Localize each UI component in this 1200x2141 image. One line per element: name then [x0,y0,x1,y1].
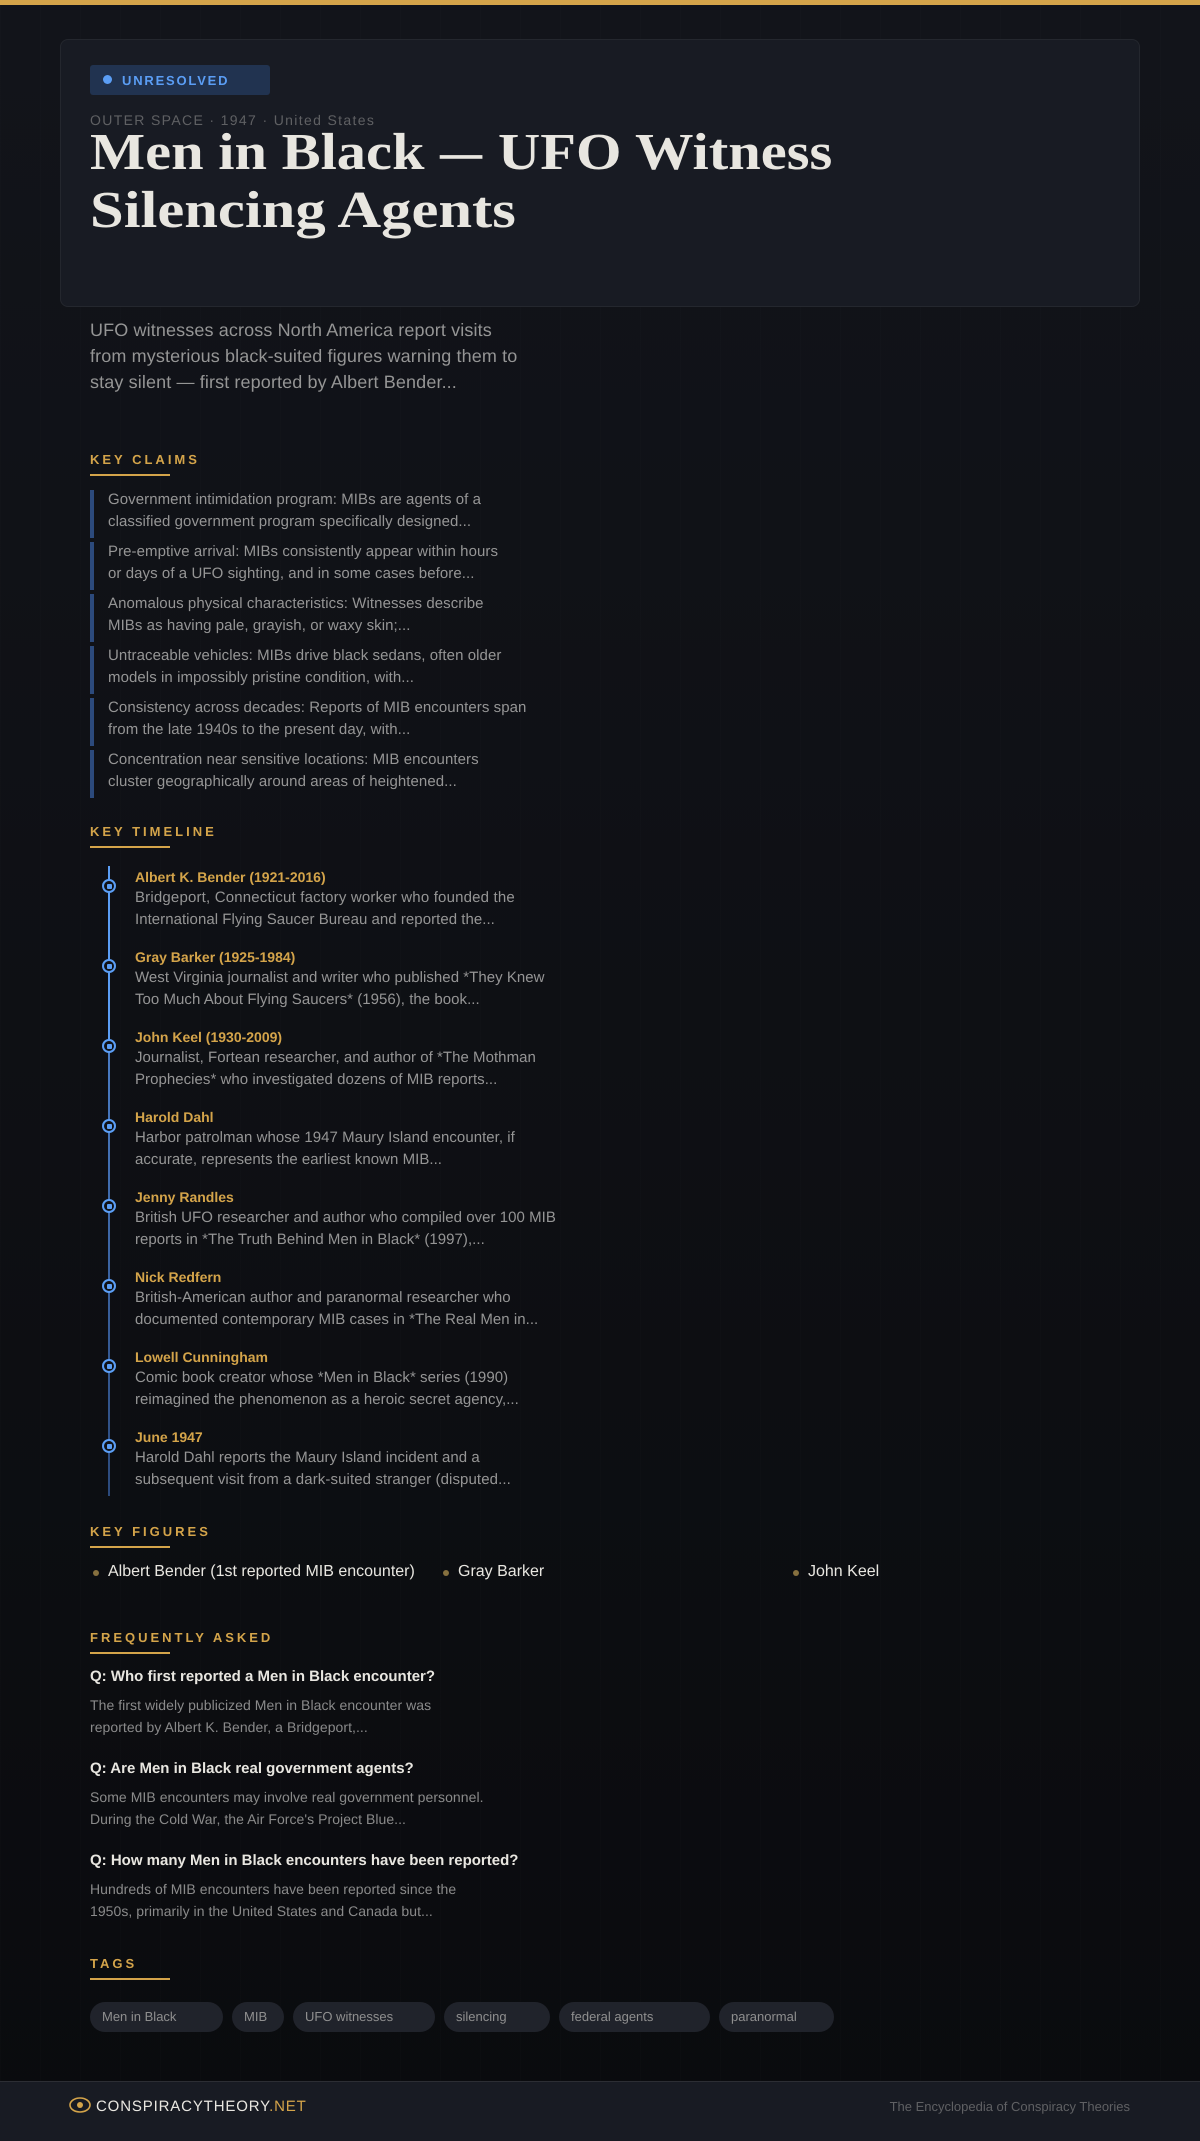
event: John Keel: Journalist, Fortean researcher, and author of *The Mothman [135,1049,536,1066]
heading: key claims: KEY CLAIMS [90,452,200,467]
event: June 1947: Harold Dahl reports the Maury Island incident and a [135,1449,480,1466]
event: Lowell Cunningham: reimagined the phenomenon as a heroic secret agency,... [135,1391,519,1408]
faq 2 [90,1760,484,1827]
tag: MIB: MIB [244,2009,267,2024]
title: Silencing Agents [90,182,516,239]
badge label: UNRESOLVED [122,73,229,88]
claim 5: Consistency across decades: Reports of MIB encounters span [108,699,526,716]
event: Gray Barker: Gray Barker (1925-1984) [135,949,295,965]
faq 1: reported by Albert K. Bender, a Bridgeport,... [90,1719,368,1735]
tag: paranormal: paranormal [731,2009,797,2024]
node 4 [102,1119,116,1133]
tag: MIB [232,2002,284,2032]
title: — [440,124,482,181]
figure: Gray Barker: Gray Barker [458,1563,544,1580]
event: Lowell Cunningham: Comic book creator whose *Men in Black* series (1990) [135,1369,508,1386]
faq 2: During the Cold War, the Air Force's Project Blue... [90,1811,406,1827]
faq 1: Q: Who first reported a Men in Black encounter? [90,1668,435,1685]
event: Harold Dahl: accurate, represents the earliest known MIB... [135,1151,442,1168]
claim 5: from the late 1940s to the present day, with... [108,721,410,738]
event: John Keel [135,1029,536,1088]
node 1 [102,879,116,893]
icon: status dot [103,75,112,84]
faq 3 [90,1852,518,1919]
claim 5 [90,698,550,746]
node 5 [102,1199,116,1213]
faq 1 [90,1668,435,1735]
meta line: OUTER SPACE · 1947 · United States [90,112,375,128]
event: Jenny Randles: British UFO researcher and author who compiled over 100 MIB [135,1209,556,1226]
timeline line [108,866,110,1496]
claim 2: or days of a UFO sighting, and in some cases before... [108,565,474,582]
tag: UFO witnesses: UFO witnesses [305,2009,393,2024]
logo wordmark: CONSPIRACYTHEORY.NET [96,2098,307,2115]
claim 3 [90,594,550,642]
footer [0,2081,1200,2141]
event: Harold Dahl [135,1109,515,1168]
faq 3: Q: How many Men in Black encounters have been reported? [90,1852,518,1869]
event: Harold Dahl: Harbor patrolman whose 1947 Maury Island encounter, if [135,1129,515,1146]
tag: federal agents [559,2002,710,2032]
claim 4: Untraceable vehicles: MIBs drive black sedans, often older [108,647,501,664]
event: Lowell Cunningham [135,1349,519,1408]
event: Albert K. Bender: Albert K. Bender (1921-2016) [135,869,326,885]
event: John Keel: John Keel (1930-2009) [135,1029,282,1045]
heading: key figures: KEY FIGURES [90,1524,211,1539]
description: UFO witnesses across North America report visits [90,320,492,340]
node 6 [102,1279,116,1293]
event: Jenny Randles: Jenny Randles [135,1189,234,1205]
event: Albert K. Bender: Bridgeport, Connecticut factory worker who founded the [135,889,515,906]
event: Harold Dahl: Harold Dahl [135,1109,214,1125]
claim 3: Anomalous physical characteristics: Witnesses describe [108,595,484,612]
description [90,320,517,392]
tag: silencing: silencing [456,2009,507,2024]
event: June 1947: subsequent visit from a dark-suited stranger (disputed... [135,1471,511,1488]
tag: Men in Black: Men in Black [102,2009,176,2024]
node 8 [102,1439,116,1453]
heading: tags: TAGS [90,1956,137,1971]
node 2 [102,959,116,973]
event: Jenny Randles: reports in *The Truth Behind Men in Black* (1997),... [135,1231,485,1248]
faq 3: 1950s, primarily in the United States and Canada but... [90,1903,433,1919]
event: June 1947 [135,1429,511,1488]
tagline: The Encyclopedia of Conspiracy Theories [890,2099,1130,2114]
claim 2: Pre-emptive arrival: MIBs consistently appear within hours [108,543,498,560]
event: John Keel: Prophecies* who investigated dozens of MIB reports... [135,1071,497,1088]
tag: silencing [444,2002,550,2032]
title [90,124,832,239]
event: Nick Redfern: British-American author and paranormal researcher who [135,1289,511,1306]
event: Nick Redfern [135,1269,538,1328]
faq 2: Some MIB encounters may involve real government personnel. [90,1789,484,1805]
panel: hero [60,39,1140,307]
description: from mysterious black-suited figures warning them to [90,346,517,366]
claim 6: Concentration near sensitive locations: MIB encounters [108,751,479,768]
event: Nick Redfern: documented contemporary MIB cases in *The Real Men in... [135,1311,538,1328]
tag: UFO witnesses [293,2002,435,2032]
heading: key timeline: KEY TIMELINE [90,824,217,839]
event: Albert K. Bender: International Flying Saucer Bureau and reported the... [135,911,495,928]
event: June 1947: June 1947 [135,1429,203,1445]
status badge [90,65,270,95]
event: Gray Barker: West Virginia journalist and writer who published *They Knew [135,969,545,986]
node 7 [102,1359,116,1373]
tag: paranormal [719,2002,834,2032]
event: Nick Redfern: Nick Redfern [135,1269,221,1285]
claim 3: MIBs as having pale, grayish, or waxy skin;... [108,617,411,634]
faq 2: Q: Are Men in Black real government agents? [90,1760,414,1777]
figure: John Keel: John Keel [808,1563,879,1580]
event: Lowell Cunningham: Lowell Cunningham [135,1349,268,1365]
event: Gray Barker: Too Much About Flying Saucers* (1956), the book... [135,991,480,1008]
event: Jenny Randles [135,1189,556,1248]
claim 1: classified government program specifically designed... [108,513,471,530]
event: Albert K. Bender [135,869,515,928]
description: stay silent — first reported by Albert Bender... [90,372,457,392]
claim 4: models in impossibly pristine condition, with... [108,669,414,686]
claim 1: Government intimidation program: MIBs are agents of a [108,491,481,508]
faq 3: Hundreds of MIB encounters have been reported since the [90,1881,456,1897]
claim 2 [90,542,550,590]
timeline [108,866,110,1496]
figure: Albert Bender: Albert Bender (1st reported MIB encounter) [108,1563,415,1580]
heading: frequently asked: FREQUENTLY ASKED [90,1630,273,1645]
tag: Men in Black [90,2002,223,2032]
icon: eye logo [69,2097,91,2113]
top accent bar [0,0,1200,5]
panel: key claims [90,490,526,798]
claim 4 [90,646,550,694]
claim 6 [90,750,550,798]
faq 1: The first widely publicized Men in Black encounter was [90,1697,431,1713]
claim 1 [90,490,550,538]
node 3 [102,1039,116,1053]
title: UFO Witness [498,124,832,181]
tag: federal agents: federal agents [571,2009,653,2024]
event: Gray Barker [135,949,545,1008]
title: Men in Black [90,124,424,181]
claim 6: cluster geographically around areas of heightened... [108,773,457,790]
